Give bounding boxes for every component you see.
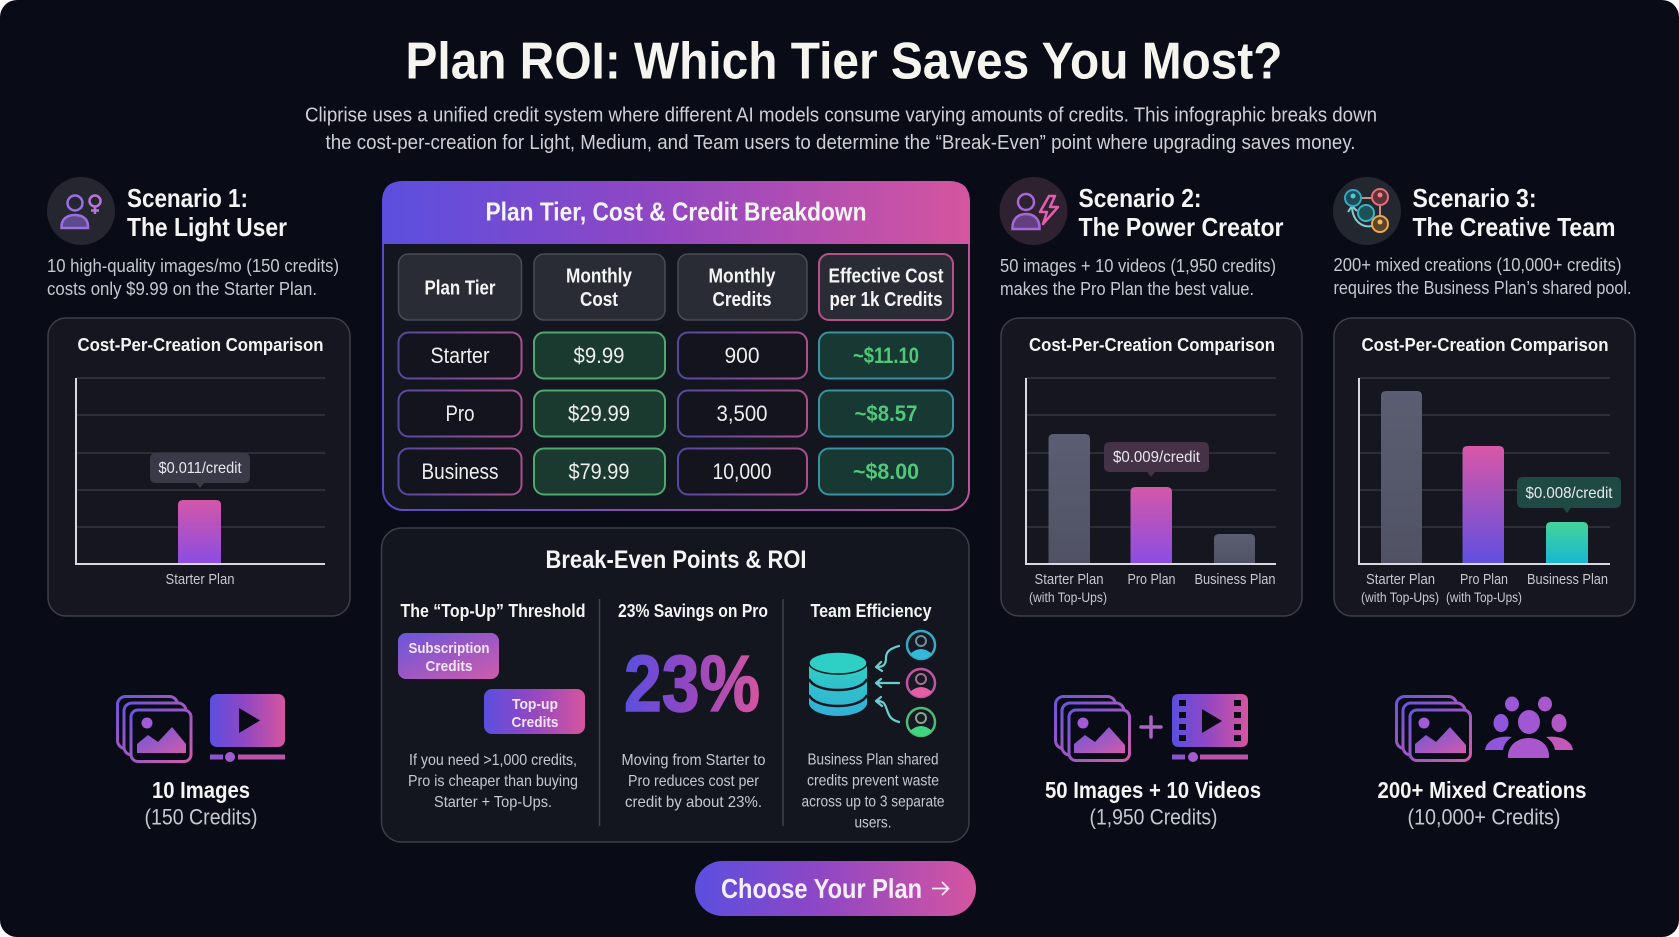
heading: scenario 3 xyxy=(1412,183,1616,242)
icon: green user xyxy=(907,708,935,736)
label: 50 images and 10 videos: 50 Images + 10 Videos xyxy=(1045,777,1261,803)
heading: scenario 3: Scenario 3: xyxy=(1412,183,1536,213)
icon: power creator xyxy=(1000,177,1068,245)
subscription credits chip xyxy=(398,633,499,679)
heading: scenario 1: The Light User xyxy=(127,212,287,242)
heading: scenario 1: Scenario 1: xyxy=(127,183,248,213)
column: 23 percent savings xyxy=(618,601,768,811)
table row: pro: ~$8.57 xyxy=(854,401,918,426)
scenario 2 description xyxy=(1000,256,1276,299)
tooltip: 0.009 xyxy=(1104,442,1209,477)
scenario 1 description: 10 high-quality images/mo (150 credits) xyxy=(47,256,339,276)
label: 10 images: (150 Credits) xyxy=(144,804,258,830)
column: top-up threshold: If you need >1,000 credits, xyxy=(409,752,577,769)
label: 200+ mixed creations: 200+ Mixed Creations xyxy=(1378,777,1586,803)
tooltip: 0.008 xyxy=(1517,477,1621,513)
label: 10 images xyxy=(144,777,258,830)
heading: scenario 1 xyxy=(127,183,287,242)
table row: starter: ~$11.10 xyxy=(853,343,919,368)
chart card: scenario 3 bar chart: Starter Plan xyxy=(1366,572,1435,588)
chart card: scenario 3 bar chart: (with Top-Ups) xyxy=(1361,590,1439,605)
button: choose your plan xyxy=(695,861,976,916)
chart card: scenario 1 bar chart: Starter Plan xyxy=(166,572,234,588)
heading: scenario 2: Scenario 2: xyxy=(1078,183,1202,213)
heading: scenario 3: The Creative Team xyxy=(1412,212,1616,242)
table header row: Cost xyxy=(580,289,618,311)
table header row: Monthly xyxy=(566,266,633,288)
icon: database xyxy=(809,652,867,716)
table row: starter: $9.99 xyxy=(574,343,624,368)
intro text xyxy=(305,104,1377,154)
column: top-up threshold: The “Top-Up” Threshold xyxy=(400,601,586,621)
panel: scenario 3 xyxy=(1333,177,1635,830)
table header row: Credits xyxy=(712,289,772,311)
big number 23%: 23% xyxy=(624,639,760,728)
button: choose your plan: Choose Your Plan xyxy=(721,873,922,904)
panel: plan tier table xyxy=(382,181,970,510)
table row: pro xyxy=(398,390,953,436)
tooltip: 0.008: $0.008/credit xyxy=(1526,485,1613,502)
table header row: per 1k Credits xyxy=(830,289,942,311)
chart card: scenario 2 bar chart xyxy=(1001,318,1302,616)
column: team efficiency: Business Plan shared xyxy=(808,752,938,768)
tooltip: 0.011 xyxy=(150,453,250,488)
icon: teal user xyxy=(907,631,935,659)
column: team efficiency: across up to 3 separate xyxy=(802,794,945,810)
icon: creative team xyxy=(1333,177,1401,245)
icon: light user xyxy=(47,177,115,245)
column: 23 percent savings: Moving from Starter to xyxy=(622,752,766,769)
table row: pro: Pro xyxy=(446,401,474,426)
chart card: scenario 1 bar chart: Cost-Per-Creation Comparison xyxy=(78,335,324,355)
top-up credits chip: Credits xyxy=(512,714,558,731)
table row: starter: Starter xyxy=(430,343,490,368)
table row: pro: 3,500 xyxy=(716,401,768,426)
table row: business: Business xyxy=(422,459,498,484)
table row: business: 10,000 xyxy=(712,459,772,484)
table header row xyxy=(398,254,953,320)
table header banner xyxy=(382,181,970,244)
column: top-up threshold: Starter + Top-Ups. xyxy=(434,794,552,811)
column: 23 percent savings: credit by about 23%. xyxy=(625,794,762,811)
subscription credits chip: Credits xyxy=(426,658,472,675)
chart card: scenario 3 bar chart: Cost-Per-Creation Comparison xyxy=(1362,335,1608,355)
intro text: Cliprise uses a unified credit system where different AI models consume varying amounts of credits. This infographic breaks down xyxy=(305,104,1377,126)
chart card: scenario 2 bar chart: Pro Plan xyxy=(1128,572,1176,588)
icon: images and video xyxy=(118,694,285,762)
column: team efficiency xyxy=(802,601,945,832)
chart card: scenario 3 bar chart: Pro Plan xyxy=(1460,572,1508,588)
table header row: Monthly xyxy=(708,266,776,288)
intro text: the cost-per-creation for Light, Medium, and Team users to determine the “Break-Even” point where upgrading saves money. xyxy=(326,132,1356,154)
chart card: scenario 2 bar chart: Starter Plan xyxy=(1034,572,1104,588)
table row: business xyxy=(398,448,953,494)
icon: pink user xyxy=(907,669,935,697)
icon: images and team xyxy=(1396,696,1573,760)
label: 200+ mixed creations xyxy=(1378,777,1586,830)
label: 10 images: 10 Images xyxy=(152,777,250,803)
tooltip: 0.011: $0.011/credit xyxy=(158,460,242,477)
scenario 1 description: costs only $9.99 on the Starter Plan. xyxy=(47,279,317,299)
scenario 1 description xyxy=(47,256,339,299)
title: Plan ROI: Which Tier Saves You Most? xyxy=(406,32,1282,90)
chart card: scenario 3 bar chart: Business Plan xyxy=(1527,572,1608,588)
top-up credits chip: Top-up xyxy=(512,696,558,713)
chart card: scenario 2 bar chart: Cost-Per-Creation Comparison xyxy=(1029,335,1275,355)
subscription credits chip: Subscription xyxy=(408,640,490,657)
chart card: scenario 2 bar chart: Business Plan xyxy=(1194,572,1276,588)
table header banner: Plan Tier, Cost & Credit Breakdown xyxy=(486,196,866,226)
label: 200+ mixed creations: (10,000+ Credits) xyxy=(1408,804,1560,830)
label: 50 images and 10 videos: (1,950 Credits) xyxy=(1090,804,1218,830)
icon: shared user arrows xyxy=(876,646,899,722)
heading: scenario 2 xyxy=(1078,183,1284,242)
table header row: Plan Tier xyxy=(424,278,496,300)
scenario 2 description: 50 images + 10 videos (1,950 credits) xyxy=(1000,256,1276,276)
label: 50 images and 10 videos xyxy=(1045,777,1261,830)
scenario 3 description xyxy=(1334,255,1632,298)
panel: scenario 2 xyxy=(1000,177,1302,830)
chart card: scenario 3 bar chart: (with Top-Ups) xyxy=(1446,590,1522,605)
table row: pro: $29.99 xyxy=(568,401,630,426)
chart card: scenario 1 bar chart xyxy=(48,318,350,616)
break-even heading: Break-Even Points & ROI xyxy=(546,546,806,574)
column: team efficiency: users. xyxy=(854,814,892,832)
icon: images plus video xyxy=(1056,694,1248,762)
column: 23 percent savings: Pro reduces cost per xyxy=(628,773,760,790)
top-up credits chip xyxy=(484,689,585,734)
column: team efficiency: Team Efficiency xyxy=(810,601,932,621)
table row: business: $79.99 xyxy=(568,459,630,484)
column: 23 percent savings: 23% Savings on Pro xyxy=(618,601,768,621)
table header row: Effective Cost xyxy=(828,266,944,288)
column: team efficiency: credits prevent waste xyxy=(807,772,939,790)
column: top-up threshold: Pro is cheaper than buying xyxy=(408,773,578,790)
panel: break-even points and ROI xyxy=(382,528,969,842)
heading: scenario 2: The Power Creator xyxy=(1078,212,1284,242)
scenario 2 description: makes the Pro Plan the best value. xyxy=(1000,279,1254,299)
chart card: scenario 2 bar chart: (with Top-Ups) xyxy=(1029,590,1107,605)
panel: scenario 1 xyxy=(47,177,350,830)
scenario 3 description: requires the Business Plan’s shared pool. xyxy=(1334,278,1632,298)
table row: starter: 900 xyxy=(724,343,760,368)
tooltip: 0.009: $0.009/credit xyxy=(1113,449,1201,466)
column: top-up threshold xyxy=(398,601,586,811)
scenario 3 description: 200+ mixed creations (10,000+ credits) xyxy=(1334,255,1622,275)
table row: business: ~$8.00 xyxy=(853,459,919,484)
table row: starter xyxy=(398,332,953,378)
chart card: scenario 3 bar chart xyxy=(1334,318,1635,616)
